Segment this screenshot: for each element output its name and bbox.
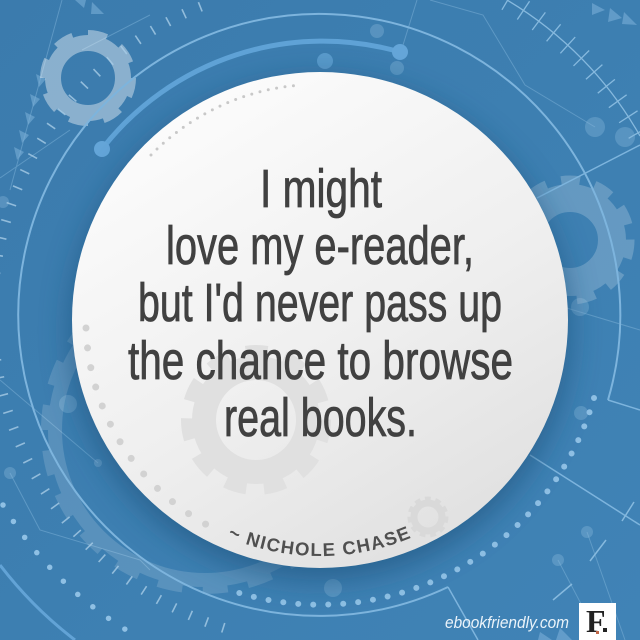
disc shadow <box>70 80 570 580</box>
bottom right tick marks <box>553 502 634 600</box>
quote text: the chance to browse <box>128 331 513 391</box>
outer tick marks <box>0 2 224 628</box>
quote text: real books. <box>224 388 417 448</box>
arc at bottom left <box>0 565 75 640</box>
quote text: love my e-reader, <box>166 216 474 276</box>
dotted arc bottom left <box>3 505 140 638</box>
quote text <box>128 159 513 448</box>
small gear on disc <box>410 498 446 536</box>
attribution: ~ NICHOLE CHASE <box>230 526 410 556</box>
logo <box>579 603 616 640</box>
gear: large bottom left <box>45 270 365 590</box>
dotted arc on disc top <box>151 85 301 155</box>
quote disc <box>72 72 568 568</box>
quote text: I might <box>260 159 382 219</box>
site name: ebookfriendly.com <box>445 613 569 632</box>
gear: right <box>510 180 630 300</box>
thick arc with end dots <box>94 41 408 157</box>
dotted arc on disc lower left <box>86 328 209 526</box>
diagonal lines <box>530 145 640 525</box>
gear on disc <box>187 351 325 489</box>
quote text: but I'd never pass up <box>138 273 502 333</box>
logo: F <box>586 603 606 639</box>
dotted arc around disc <box>236 398 594 605</box>
gear: top left <box>44 34 132 122</box>
crossed tick arc <box>507 0 640 136</box>
